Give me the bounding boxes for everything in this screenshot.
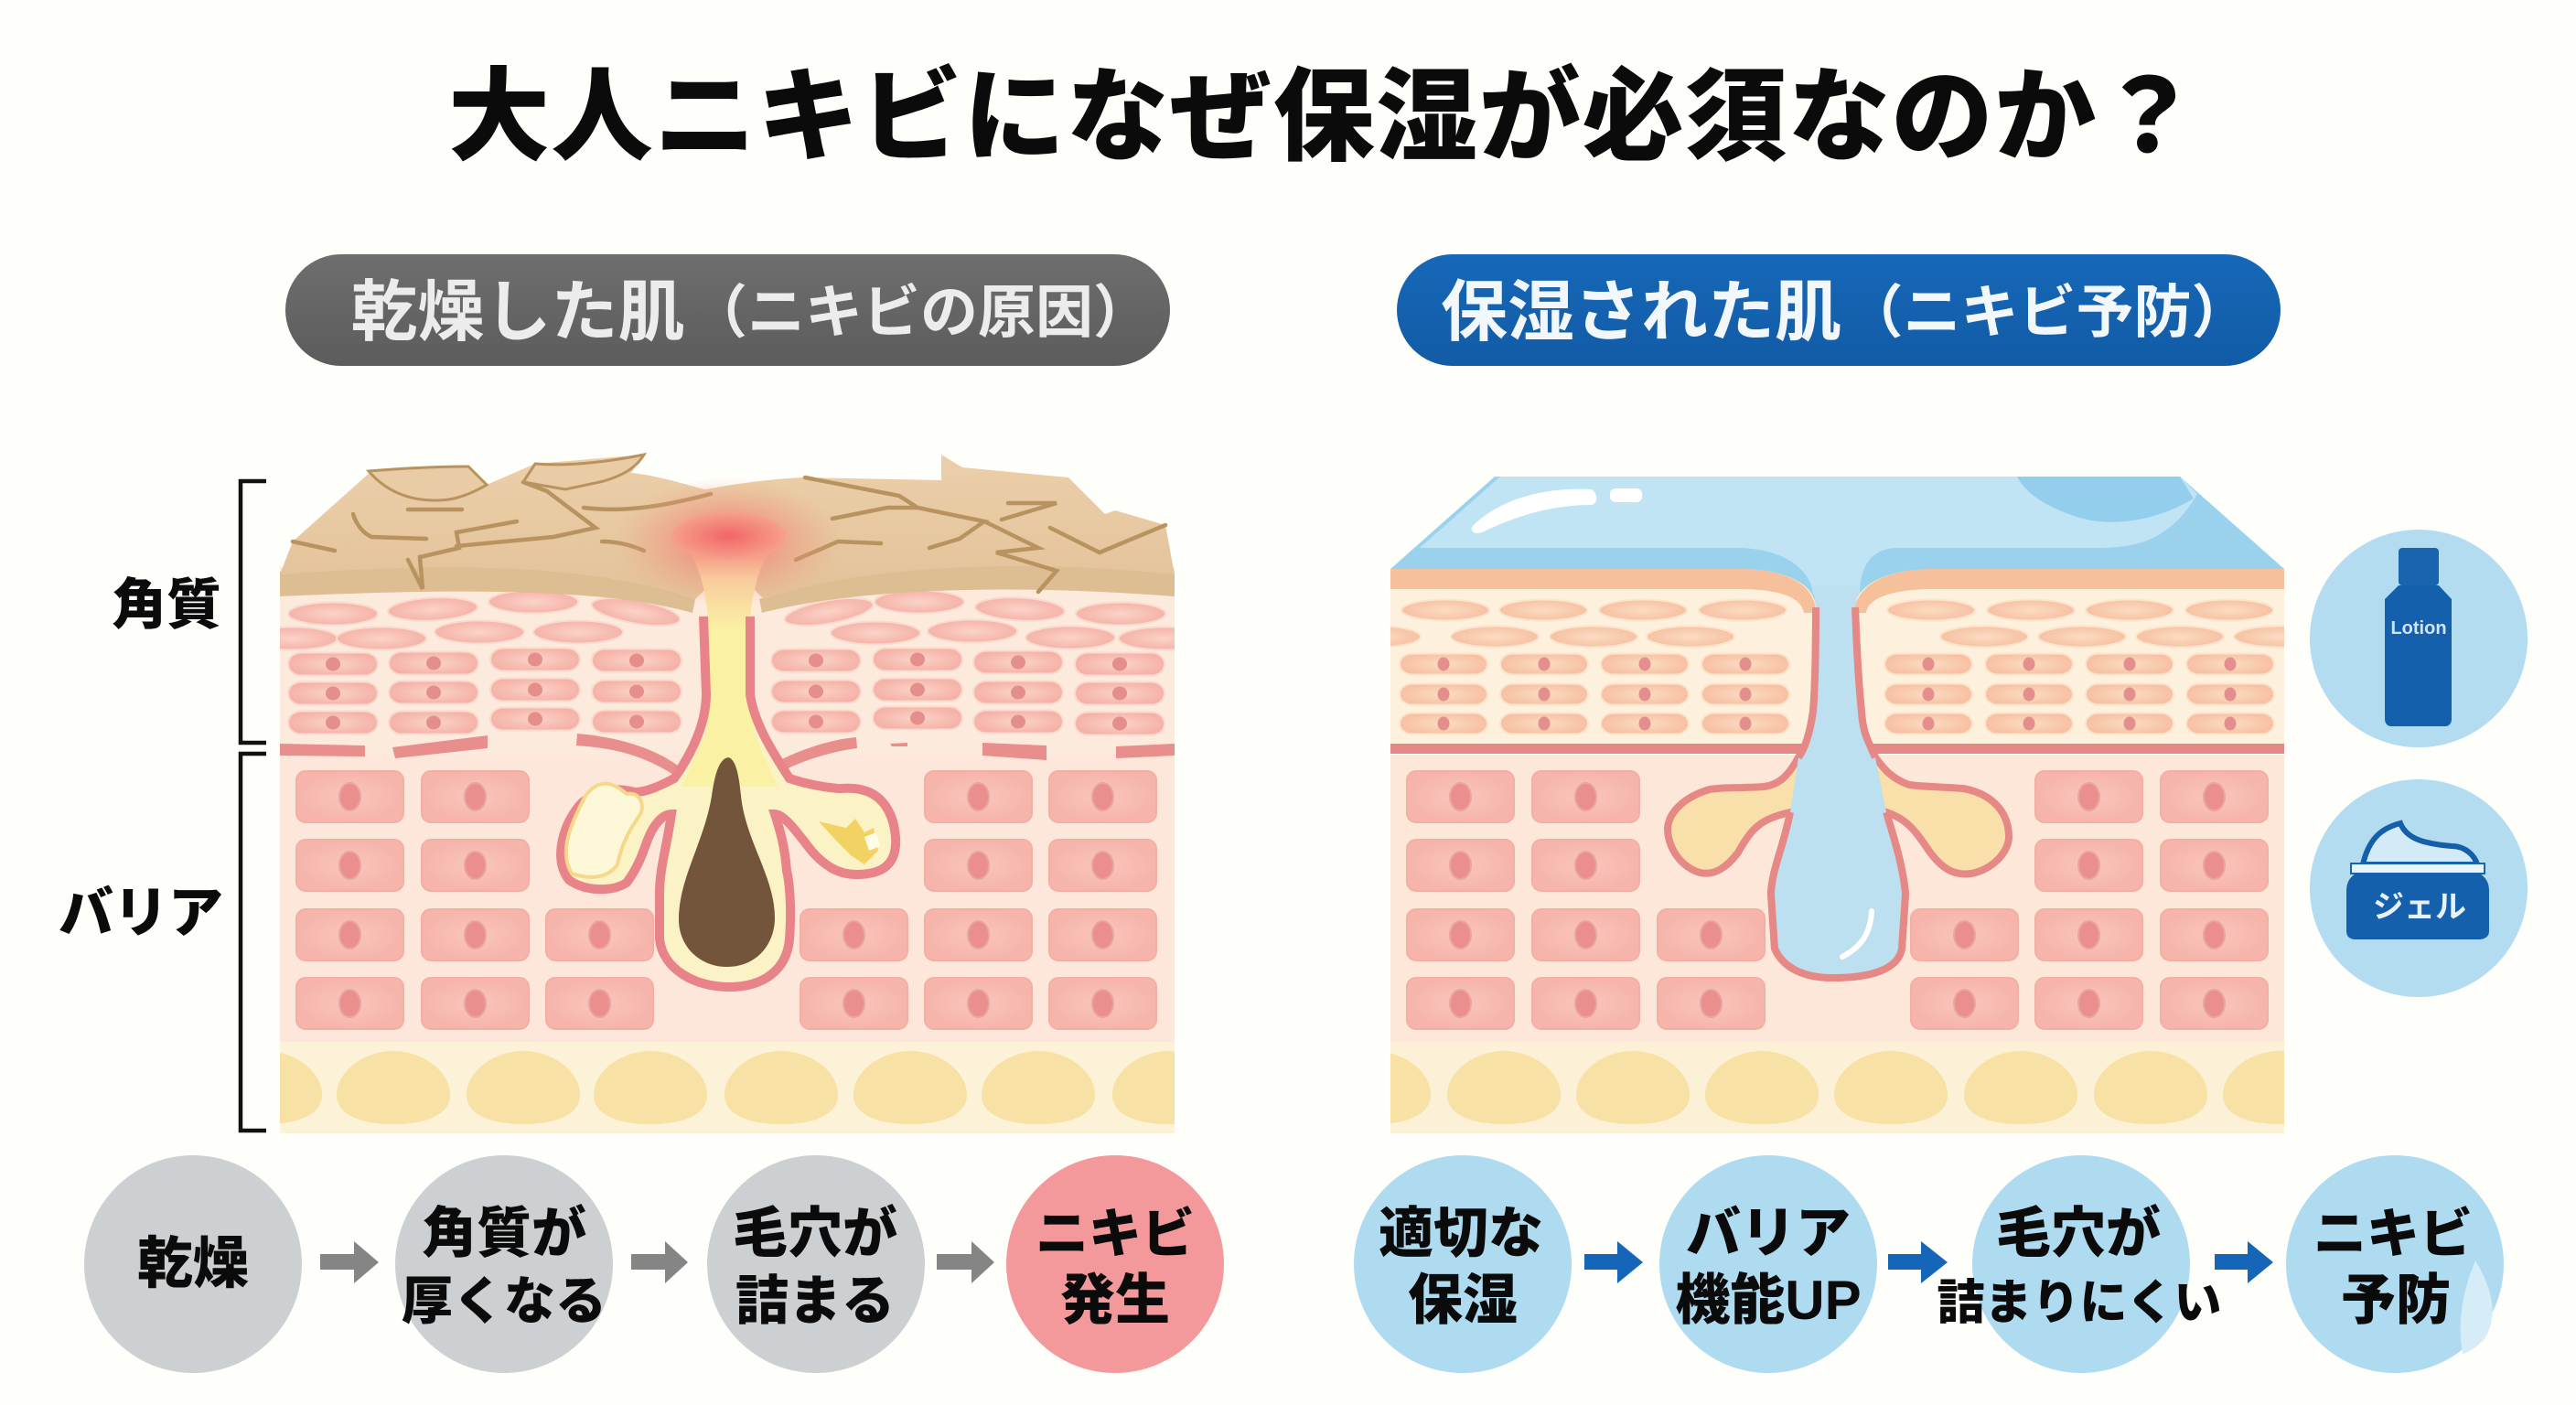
clogged sebum: right gland bbox=[819, 819, 878, 864]
step: pores clog bbox=[707, 1155, 925, 1373]
flow: acne prevention bbox=[1354, 1155, 2504, 1373]
label: barrier: バリア bbox=[59, 883, 223, 944]
step: pores less clogged bbox=[1937, 1155, 2221, 1373]
arrow bbox=[1584, 1241, 1643, 1283]
arrow bbox=[1888, 1241, 1948, 1283]
inflamed pore glow bbox=[629, 481, 826, 598]
heading pill: dry skin bbox=[285, 254, 1170, 366]
clogged sebum: left gland bbox=[566, 784, 642, 877]
heading pill: dry skin: （ニキビの原因） bbox=[690, 281, 1151, 345]
hair follicle: clogged bbox=[561, 540, 896, 987]
broken barrier membrane bbox=[280, 734, 1175, 776]
step: pores less clogged: 毛穴が bbox=[1996, 1203, 2161, 1264]
step: thicker corneum: 角質が bbox=[422, 1203, 586, 1264]
skin base layers bbox=[1390, 569, 2284, 1133]
thickened dry horny layer bbox=[280, 455, 1175, 613]
arrow bbox=[631, 1241, 688, 1283]
heading pill: dry skin: 乾燥した肌 bbox=[351, 275, 684, 349]
pore pustule bbox=[671, 512, 787, 554]
step: acne appears: 発生 bbox=[1060, 1270, 1170, 1331]
step: acne appears: ニキビ bbox=[1036, 1205, 1195, 1264]
heading pill: moisturized skin: 保湿された肌 bbox=[1441, 275, 1841, 349]
step: dryness bbox=[84, 1155, 302, 1373]
panel: moisturized skin cross-section bbox=[1390, 477, 2284, 1133]
step: dryness: 乾燥 bbox=[137, 1232, 249, 1294]
step: proper moisturizing bbox=[1354, 1155, 1572, 1373]
heading pill: moisturized skin: （ニキビ予防） bbox=[1846, 281, 2249, 345]
step: acne prevented: ニキビ bbox=[2313, 1205, 2473, 1264]
orange horny layer bbox=[1390, 569, 2284, 613]
water-filled pore bbox=[1771, 585, 1905, 978]
step: thicker corneum bbox=[395, 1155, 613, 1373]
arrow bbox=[937, 1241, 994, 1283]
step: proper moisturizing: 適切な bbox=[1379, 1203, 1543, 1264]
fat cells bbox=[1390, 1051, 2284, 1124]
hair follicle: hydrated bbox=[1668, 585, 2009, 978]
barrier cells bbox=[296, 771, 1156, 1029]
skin cracks bbox=[293, 477, 1165, 592]
water highlights bbox=[1472, 488, 1642, 533]
step: pores clog: 毛穴が bbox=[733, 1203, 897, 1264]
arrow bbox=[320, 1241, 379, 1283]
skin base layers bbox=[280, 567, 1175, 1133]
label: stratum corneum: 角質 bbox=[112, 574, 221, 636]
flat cells with nuclei bbox=[288, 648, 1165, 735]
flow: causes of acne bbox=[84, 1155, 1224, 1373]
step: pores less clogged: 詰まりにくい bbox=[1937, 1277, 2221, 1330]
step: barrier up: 機能UP bbox=[1675, 1270, 1862, 1331]
panel: dry skin cross-section bbox=[280, 452, 1175, 1133]
icon: gel jar: ジェル bbox=[2373, 890, 2466, 925]
droplet highlight bbox=[1842, 911, 1872, 957]
step: pores clog: 詰まる bbox=[735, 1271, 895, 1331]
flat cells with nuclei bbox=[1400, 653, 2274, 734]
hair shaft bbox=[679, 757, 775, 967]
follicle wall with sebaceous glands bbox=[1668, 607, 2009, 978]
flat cells without nuclei bbox=[248, 591, 1208, 649]
step: barrier up bbox=[1659, 1155, 1877, 1373]
bracket: stratum corneum bbox=[241, 481, 266, 743]
bracket: barrier bbox=[241, 754, 266, 1131]
step: acne appears bbox=[1006, 1155, 1224, 1373]
heading pill: moisturized skin bbox=[1397, 254, 2281, 366]
icon: lotion bottle: Lotion bbox=[2390, 618, 2447, 638]
curled skin flakes bbox=[369, 455, 644, 500]
step: acne prevented: 予防 bbox=[2341, 1270, 2451, 1331]
barrier cells bbox=[1407, 771, 2268, 1029]
step: acne prevented bbox=[2286, 1155, 2504, 1373]
moisture layer bbox=[1390, 477, 2284, 608]
step: thicker corneum: 厚くなる bbox=[402, 1272, 606, 1330]
icon: gel jar bbox=[2310, 779, 2528, 997]
lower follicle wall bbox=[1771, 607, 1905, 978]
step: proper moisturizing: 保湿 bbox=[1408, 1270, 1518, 1331]
step: barrier up: バリア bbox=[1686, 1203, 1851, 1264]
title: 大人ニキビになぜ保湿が必須なのか？ bbox=[448, 60, 2199, 174]
flat cells without nuclei bbox=[1333, 600, 2322, 648]
intact barrier membrane bbox=[1390, 744, 2284, 754]
icon: lotion bottle bbox=[2310, 530, 2528, 747]
fat cells bbox=[280, 1051, 1175, 1124]
arrow bbox=[2215, 1241, 2273, 1283]
